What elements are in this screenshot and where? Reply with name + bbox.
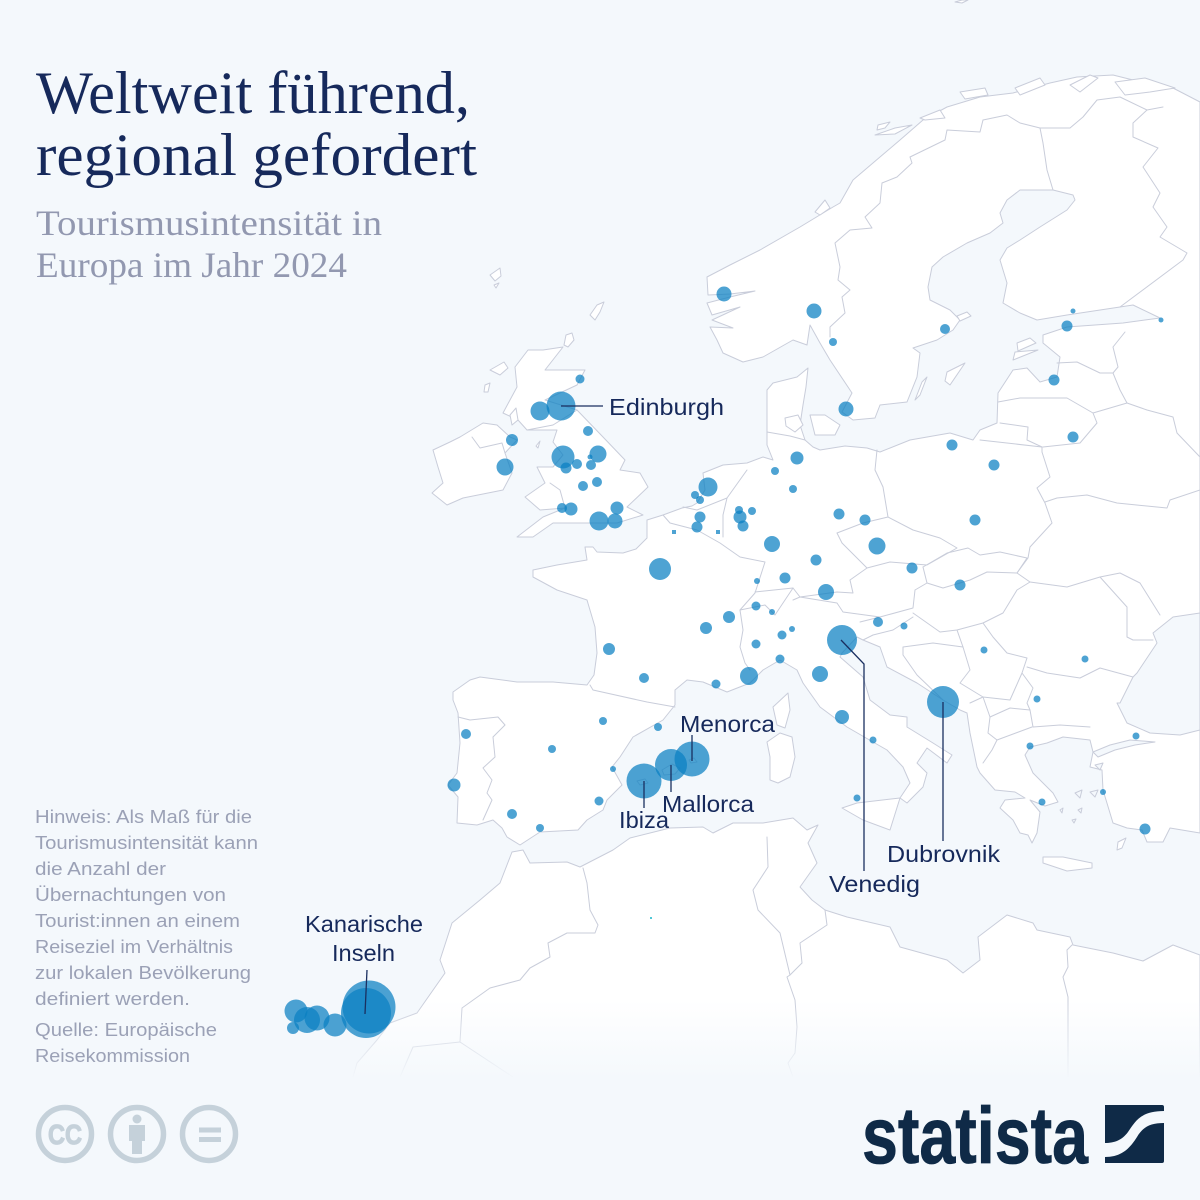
Statista logo wordmark: statista: [862, 1091, 1088, 1180]
title: Weltweit führend,: [36, 60, 470, 126]
callout: Venedig: [829, 640, 920, 897]
note: Reiseziel im Verhältnis: [35, 936, 233, 957]
callout: Kanarische Inseln: [305, 911, 423, 1014]
sea: Marmara: [1093, 740, 1155, 757]
icon: Creative Commons attribution: [110, 1108, 164, 1160]
title: regional gefordert: [36, 122, 477, 188]
note: Tourismusintensität kann: [35, 832, 258, 853]
note: [35, 806, 258, 1009]
callout: Mallorca: [662, 765, 754, 817]
source: Reisekommission: [35, 1045, 190, 1066]
subtitle: [36, 203, 382, 285]
note: zur lokalen Bevölkerung: [35, 962, 251, 983]
land: Ireland: [432, 423, 517, 505]
map of Europe and North Africa: [353, 0, 1200, 1200]
icon: Creative Commons no derivatives: [182, 1108, 236, 1160]
sea: Black Sea: [1117, 613, 1200, 735]
land: Norwegian coast islands: [815, 75, 1175, 215]
note: Tourist:innen an einem: [35, 910, 240, 931]
callout: Kanarische Inseln: Kanarische: [305, 911, 423, 937]
land: Great Britain: [503, 347, 648, 537]
callout: Menorca: Menorca: [680, 711, 775, 737]
callout: Kanarische Inseln: Inseln: [332, 940, 395, 966]
land: North Africa: [353, 818, 1200, 1200]
subtitle: Tourismusintensität in: [36, 203, 382, 243]
callout: Ibiza: Ibiza: [619, 807, 669, 833]
note: Hinweis: Als Maß für die: [35, 806, 252, 827]
callout: Menorca: [680, 711, 775, 761]
callout: Dubrovnik: Dubrovnik: [887, 841, 1001, 867]
callout: Edinburgh: Edinburgh: [609, 394, 724, 420]
note: die Anzahl der: [35, 858, 166, 879]
land: Mediterranean islands: [637, 693, 1126, 871]
icon: Creative Commons CC: CC: [48, 1119, 82, 1150]
subtitle: Europa im Jahr 2024: [36, 245, 347, 285]
callout: Ibiza: [619, 781, 669, 833]
callout: Venedig: Venedig: [829, 871, 920, 897]
note: definiert werden.: [35, 988, 190, 1009]
land: Aegean islands: [1060, 763, 1103, 823]
tiny marker in Algeria: [650, 917, 652, 919]
borders between countries: [400, 97, 1200, 1077]
source: Quelle: Europäische: [35, 1019, 217, 1040]
note: Übernachtungen von: [35, 884, 226, 905]
land: mainland Europe: [448, 75, 1200, 845]
source: [35, 1019, 217, 1066]
land: Baltic and North Sea islands: [484, 0, 1038, 448]
bubbles: tourism intensity by region: [284, 286, 1164, 1038]
callout: Mallorca: Mallorca: [662, 791, 754, 817]
fade at bottom of the map: [340, 1000, 1200, 1080]
icon: Creative Commons CC: [38, 1108, 92, 1160]
title: [36, 60, 477, 188]
Statista logo mark: [1105, 1105, 1164, 1163]
